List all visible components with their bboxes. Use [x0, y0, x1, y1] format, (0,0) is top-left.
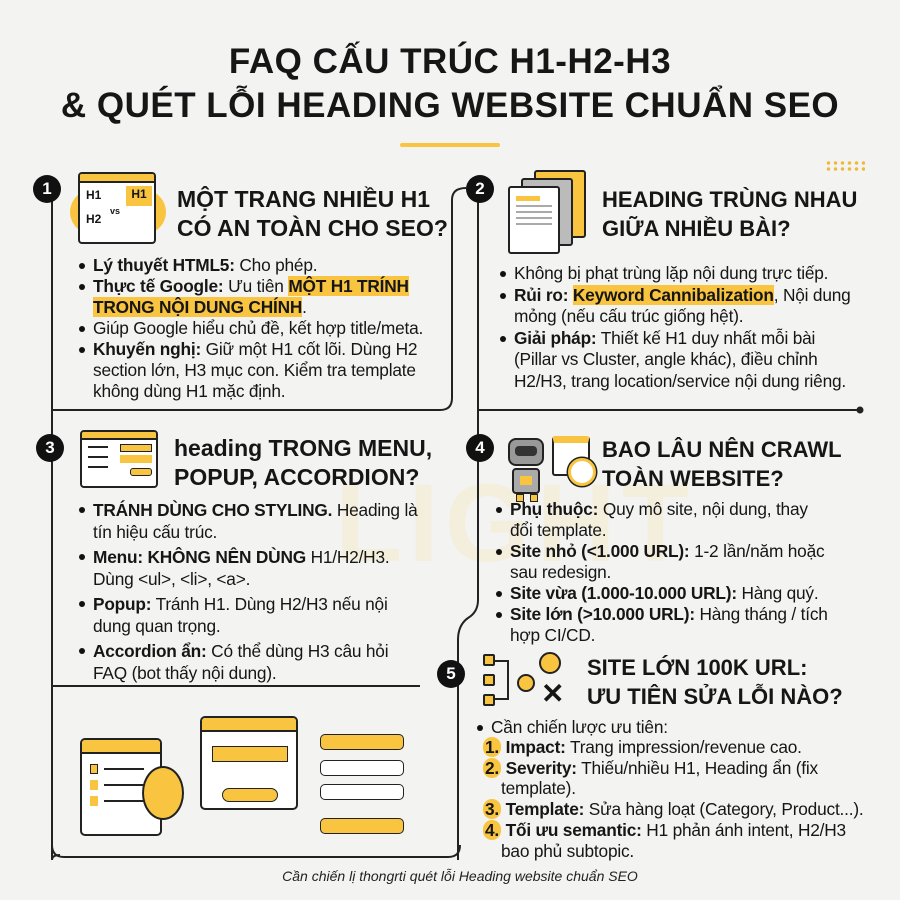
bullets 3: TRÁNH DÙNG CHO STYLING. Heading là tín hiệu cấu trúc.: [93, 500, 418, 542]
bullets 4: hợp CI/CD.: [510, 625, 595, 645]
section 5: template).: [501, 778, 576, 798]
bullets 2: Rủi ro: Keyword Cannibalization, Nội dung mỏng (nếu cấu trúc giống hệt).: [514, 284, 851, 326]
bullets 3: Menu: KHÔNG NÊN DÙNG H1/H2/H3. Dùng <ul>, <li>, <a>.: [93, 547, 389, 589]
bullets 2: Giải pháp: Thiết kế H1 duy nhất mỗi bài (Pillar vs Cluster, angle khác), điều chỉnh H2/H3, trang location/service nội dung riêng.: [514, 328, 846, 390]
bullets 2: Không bị phạt trùng lặp nội dung trực tiếp.: [514, 263, 828, 283]
section 5: bao phủ subtopic.: [501, 841, 634, 861]
heading 4: BAO LÂU NÊN CRAWL: [602, 437, 842, 462]
text: & QUÉT LỖI HEADING WEBSITE CHUẨN SEO: [61, 86, 839, 125]
watermark: LIGHT: [335, 462, 695, 585]
icon: H1 vs H1: [70, 172, 166, 244]
bullets 1: Thực tế Google: Ưu tiên MỘT H1 TRÍNH TRONG NỘI DUNG CHÍNH.: [93, 276, 409, 317]
section 5: 3. Template: Sửa hàng loạt (Category, Product...).: [485, 799, 864, 819]
section 5: 1. Impact: Trang impression/revenue cao.: [485, 737, 802, 757]
section 1: [33, 172, 448, 401]
icon: H1 vs H1: H1: [86, 188, 101, 202]
bullets 1: [79, 255, 423, 401]
section 2: [466, 170, 857, 390]
bullets 4: Phụ thuộc: Quy mô site, nội dung, thay: [510, 499, 808, 519]
badge 1: 1: [42, 179, 52, 198]
title: FAQ CẤU TRÚC H1-H2-H3: [229, 42, 671, 81]
heading 3: POPUP, ACCORDION?: [174, 464, 419, 490]
badge 2: [466, 175, 494, 203]
heading 4: TOÀN WEBSITE?: [602, 466, 784, 491]
decorative dots: [825, 160, 865, 172]
bullets 4: Site vừa (1.000-10.000 URL): Hàng quý.: [510, 583, 818, 603]
badge 4: 4: [475, 438, 485, 457]
bullets 5: Cần chiến lược ưu tiên:: [491, 717, 668, 737]
heading 5: SITE LỚN 100K URL:: [587, 655, 807, 680]
bullets 4: Site nhỏ (<1.000 URL): 1-2 lần/năm hoặc: [510, 541, 824, 561]
bullets 1: Giúp Google hiểu chủ đề, kết hợp title/meta.: [93, 318, 423, 338]
bullets 3: [79, 500, 418, 683]
bullets 1: Lý thuyết HTML5: Cho phép.: [93, 255, 317, 275]
caption: Cần chiến lị thongrti quét lỗi Heading website chuẩn SEO: [282, 868, 638, 884]
heading 1: [177, 186, 448, 241]
section 3: [36, 430, 432, 683]
section 4: [466, 434, 842, 645]
badge 5: [437, 660, 465, 688]
bullets 4: sau redesign.: [510, 562, 611, 582]
icon: menu window: [80, 430, 158, 488]
bullets 3: Popup: Tránh H1. Dùng H2/H3 nếu nội dung quan trọng.: [93, 594, 388, 636]
section 5: 2. Severity: Thiếu/nhiều H1, Heading ẩn (fix: [485, 758, 818, 778]
bullets 2: [500, 263, 851, 390]
heading 5: ƯU TIÊN SỬA LỖI NÀO?: [587, 684, 843, 709]
icon: documents: [508, 170, 586, 254]
heading 1: MỘT TRANG NHIỀU H1: [177, 186, 430, 212]
badge 3: [36, 434, 64, 462]
heading 2: GIỮA NHIỀU BÀI?: [602, 216, 791, 241]
section 5: 4. Tối ưu semantic: H1 phản ánh intent, H2/H3: [485, 820, 846, 840]
badge 3: 3: [45, 438, 55, 457]
heading 3: heading TRONG MENU,: [174, 435, 432, 461]
heading 4: [602, 437, 842, 491]
heading 1: CÓ AN TOÀN CHO SEO?: [177, 215, 448, 241]
illustration: menu popup accordion: [80, 716, 404, 836]
icon: robot and calendar: [508, 436, 598, 502]
badge 5: 5: [446, 664, 456, 683]
icon: H1 vs H1: H2: [86, 212, 101, 226]
badge 4: [466, 434, 494, 462]
heading 2: HEADING TRÙNG NHAU: [602, 187, 857, 212]
heading 3: [174, 435, 432, 490]
icon: tools tree: ✕: [541, 678, 564, 709]
heading 5: [587, 655, 843, 709]
badge 2: 2: [475, 179, 485, 198]
bullets 4: [496, 499, 828, 645]
badge 1: [33, 175, 61, 203]
bullets 1: Khuyến nghị: Giữ một H1 cốt lõi. Dùng H2 section lớn, H3 mục con. Kiểm tra template không dùng H1 mặc định.: [93, 339, 417, 401]
icon: H1 vs H1: vs: [110, 206, 120, 216]
bullets 3: Accordion ẩn: Có thể dùng H3 câu hỏi FAQ (bot thấy nội dung).: [93, 641, 388, 683]
bullets 4: Site lớn (>10.000 URL): Hàng tháng / tích: [510, 604, 828, 624]
heading 2: [602, 187, 857, 241]
bullets 4: đổi template.: [510, 520, 606, 540]
icon: tools tree: [483, 652, 564, 709]
icon: H1 vs H1: H1: [131, 187, 147, 201]
section 5: [437, 652, 864, 861]
